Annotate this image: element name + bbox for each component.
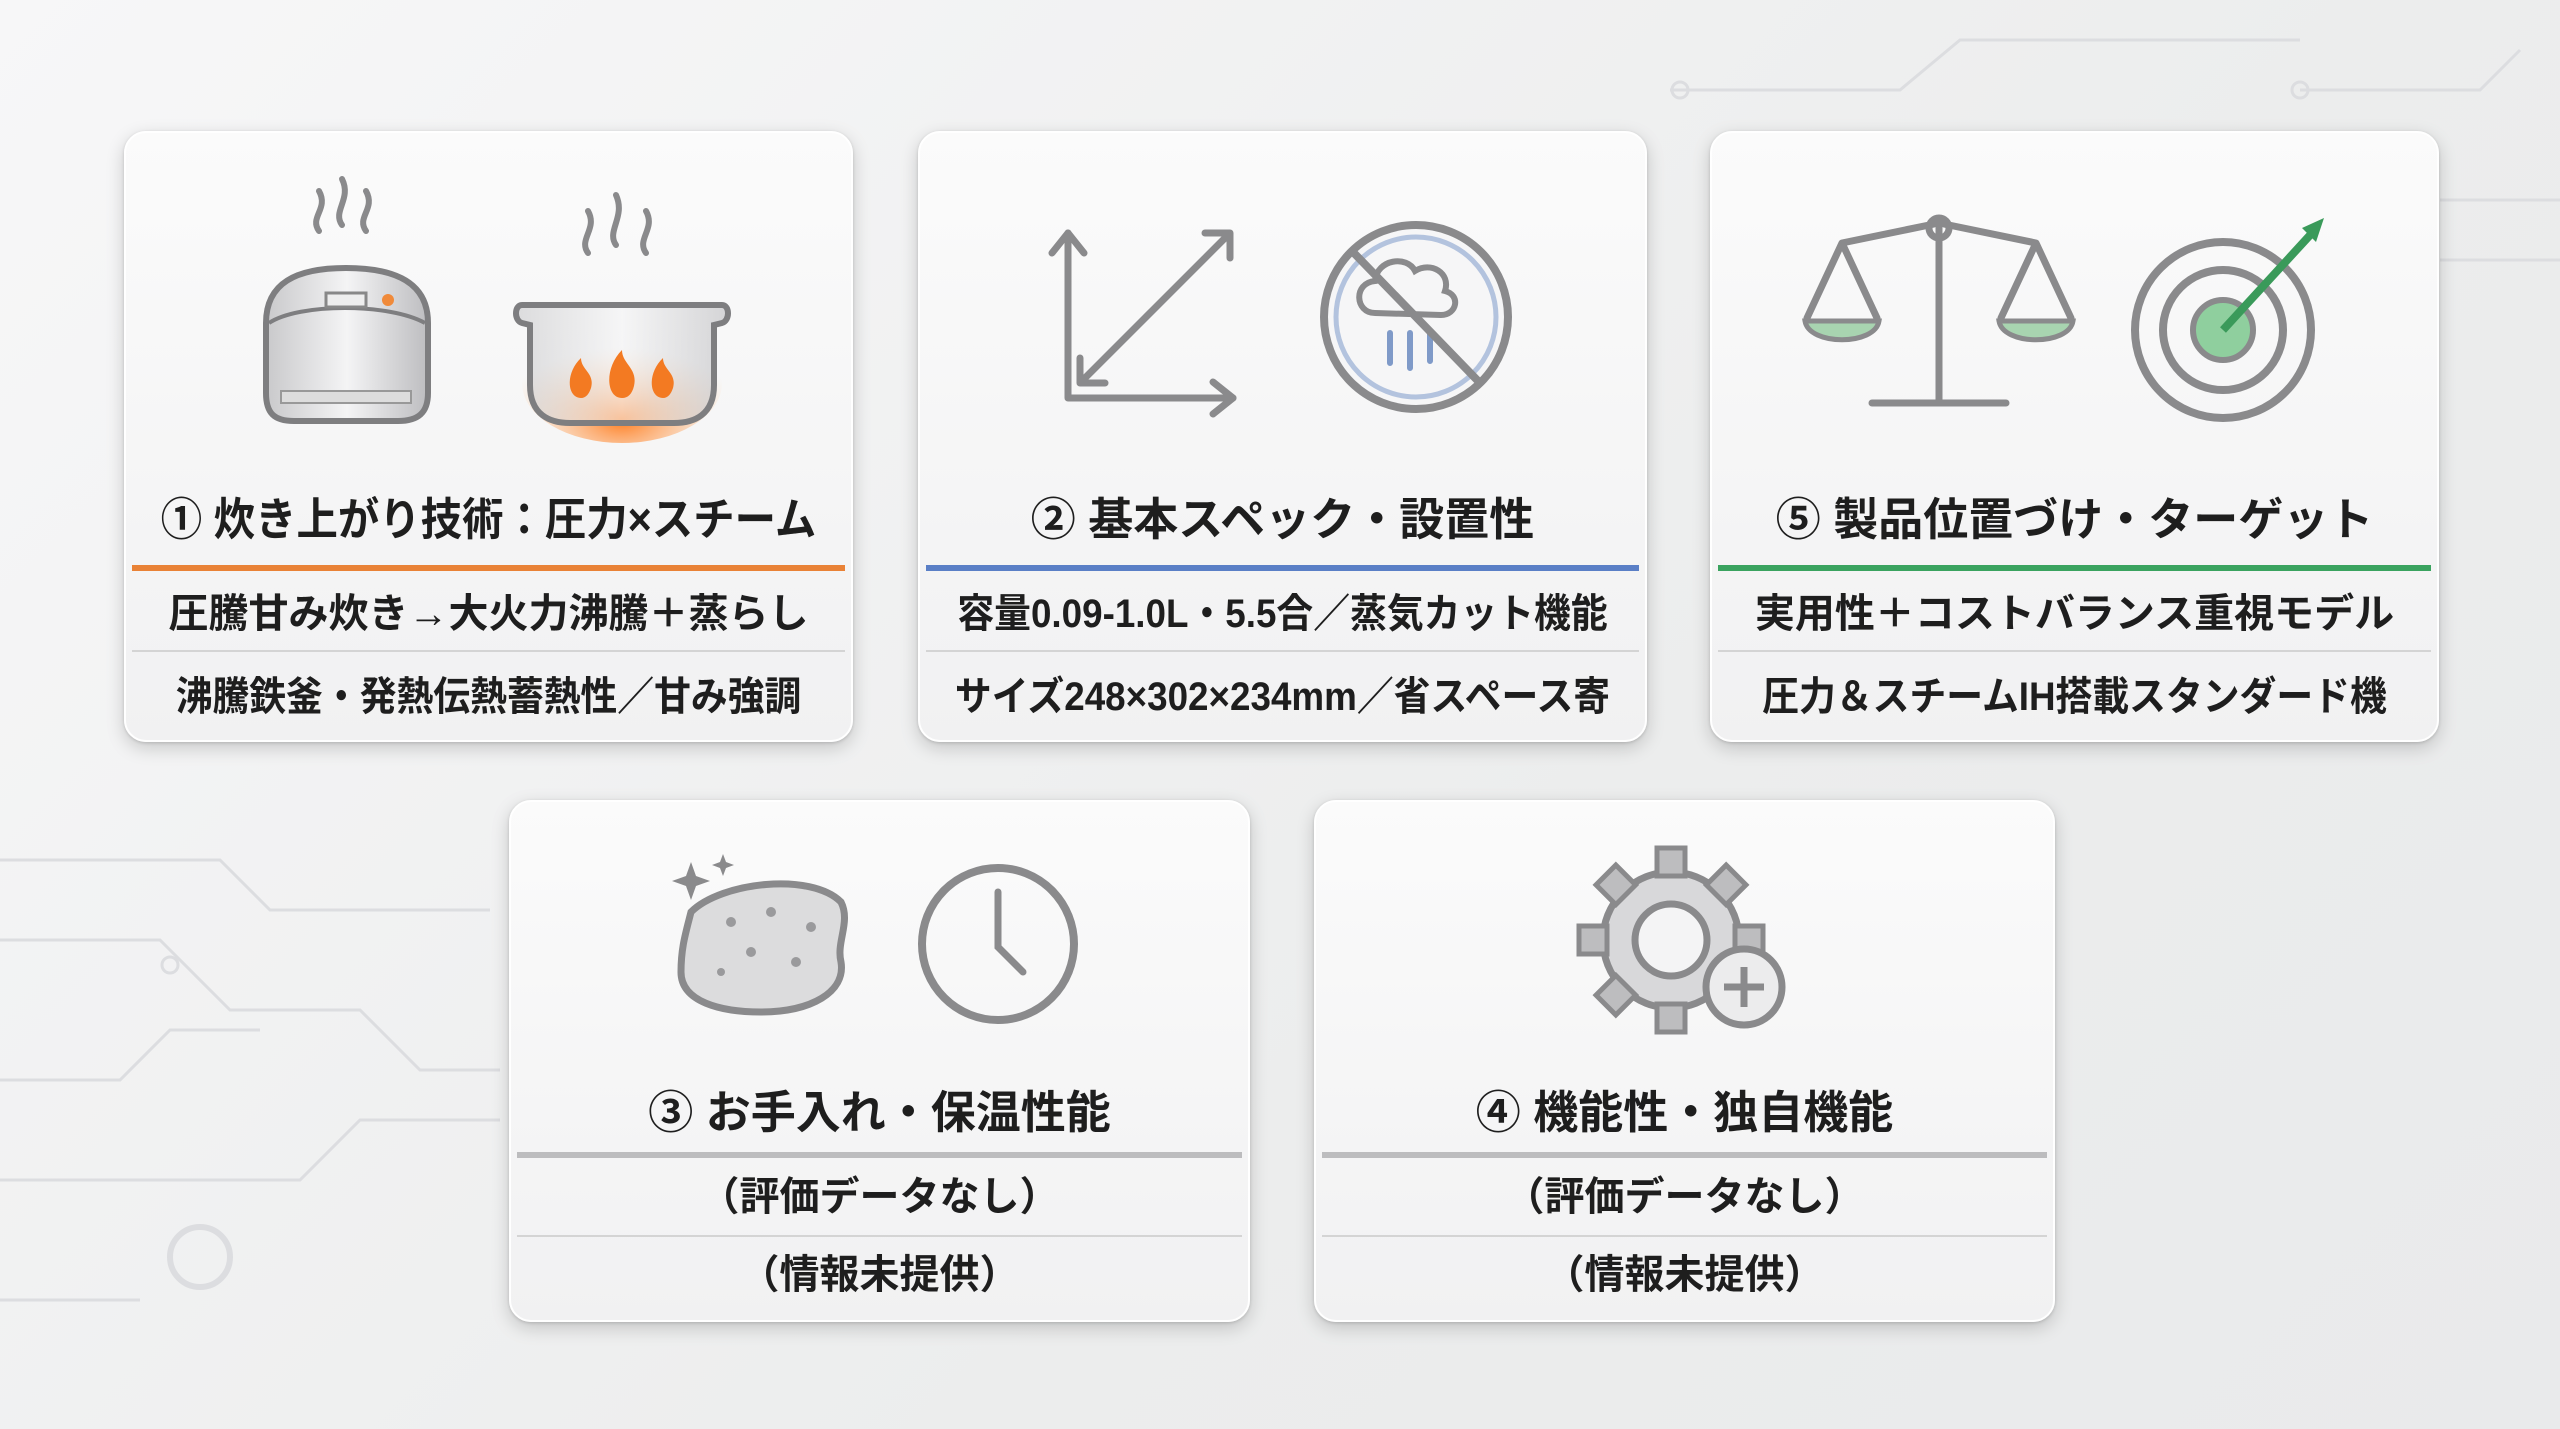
icons: scale and target xyxy=(1802,214,2324,422)
row 2: 圧力＆スチームIH搭載スタンダード機 xyxy=(1762,675,2387,719)
row 1: 容量0.09-1.0L・5.5合／蒸気カット機能 xyxy=(957,592,1608,636)
row 2: サイズ248×302×234mm／省スペース寄 xyxy=(955,675,1610,719)
icons: dimensions arrows and steam cut xyxy=(1048,221,1512,418)
title: ① 炊き上がり技術：圧力×スチーム xyxy=(161,494,816,545)
row 1: 圧騰甘み炊き→大火力沸騰＋蒸らし xyxy=(168,592,808,636)
title: ⑤ 製品位置づけ・ターゲット xyxy=(1776,494,2373,545)
row 2: （情報未提供） xyxy=(1544,1253,1824,1297)
row 1: （評価データなし） xyxy=(700,1175,1060,1219)
icon: gear with plus xyxy=(1576,846,1786,1034)
panel 4: care and keep warm xyxy=(509,800,1250,1322)
icons: rice cooker and pot with flame xyxy=(263,176,731,443)
row 1: 実用性＋コストバランス重視モデル xyxy=(1755,592,2394,636)
icons: sponge and clock xyxy=(672,854,1078,1024)
panel 3: positioning xyxy=(1710,131,2439,742)
panel 5: features xyxy=(1314,800,2055,1322)
row 2: 沸騰鉄釜・発熱伝熱蓄熱性／甘み強調 xyxy=(176,675,801,719)
title: ④ 機能性・独自機能 xyxy=(1476,1087,1893,1138)
title: ③ お手入れ・保温性能 xyxy=(648,1087,1111,1138)
row 1: （評価データなし） xyxy=(1504,1175,1864,1219)
row 2: （情報未提供） xyxy=(740,1253,1020,1297)
panel 1: cooking tech xyxy=(124,131,853,742)
panel 2: specs xyxy=(918,131,1647,742)
title: ② 基本スペック・設置性 xyxy=(1031,494,1534,545)
